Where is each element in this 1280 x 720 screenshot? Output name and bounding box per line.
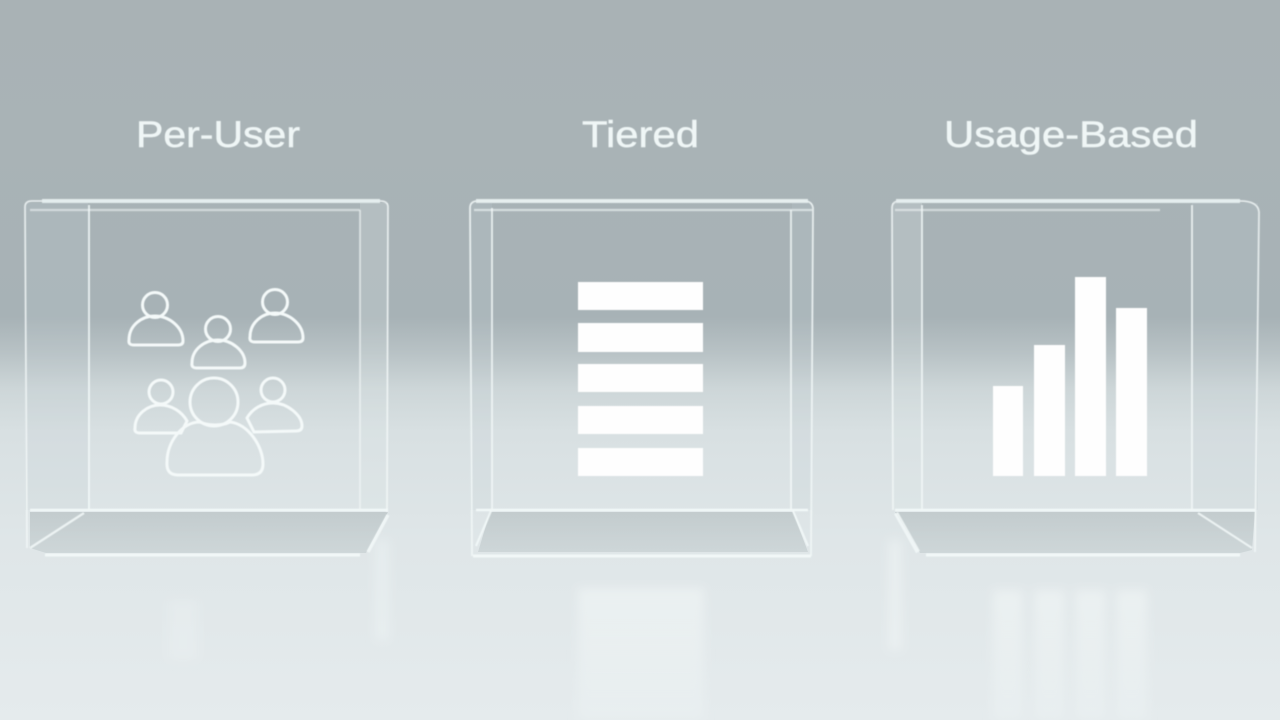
floor reflections xyxy=(168,540,1147,720)
user front large xyxy=(167,378,263,475)
heading: Tiered: Tiered xyxy=(582,114,699,155)
panel: Usage-Based glass cube xyxy=(892,201,1259,555)
cube body Per-User xyxy=(25,201,388,555)
user lower right xyxy=(247,378,302,432)
cube body Usage-Based xyxy=(892,201,1259,555)
user lower left xyxy=(135,380,187,433)
user middle xyxy=(192,316,245,368)
icon: group of users xyxy=(129,290,303,475)
heading: Per-User: Per-User xyxy=(136,114,300,155)
icon: bar chart xyxy=(993,277,1147,476)
panel: Tiered glass cube xyxy=(470,201,813,556)
panel: Per-User glass cube xyxy=(25,201,388,555)
user top left xyxy=(129,292,183,345)
cube body Tiered xyxy=(470,201,813,556)
icon: stacked tiers xyxy=(578,282,703,476)
user top right xyxy=(250,290,303,342)
heading: Usage-Based: Usage-Based xyxy=(944,114,1198,155)
